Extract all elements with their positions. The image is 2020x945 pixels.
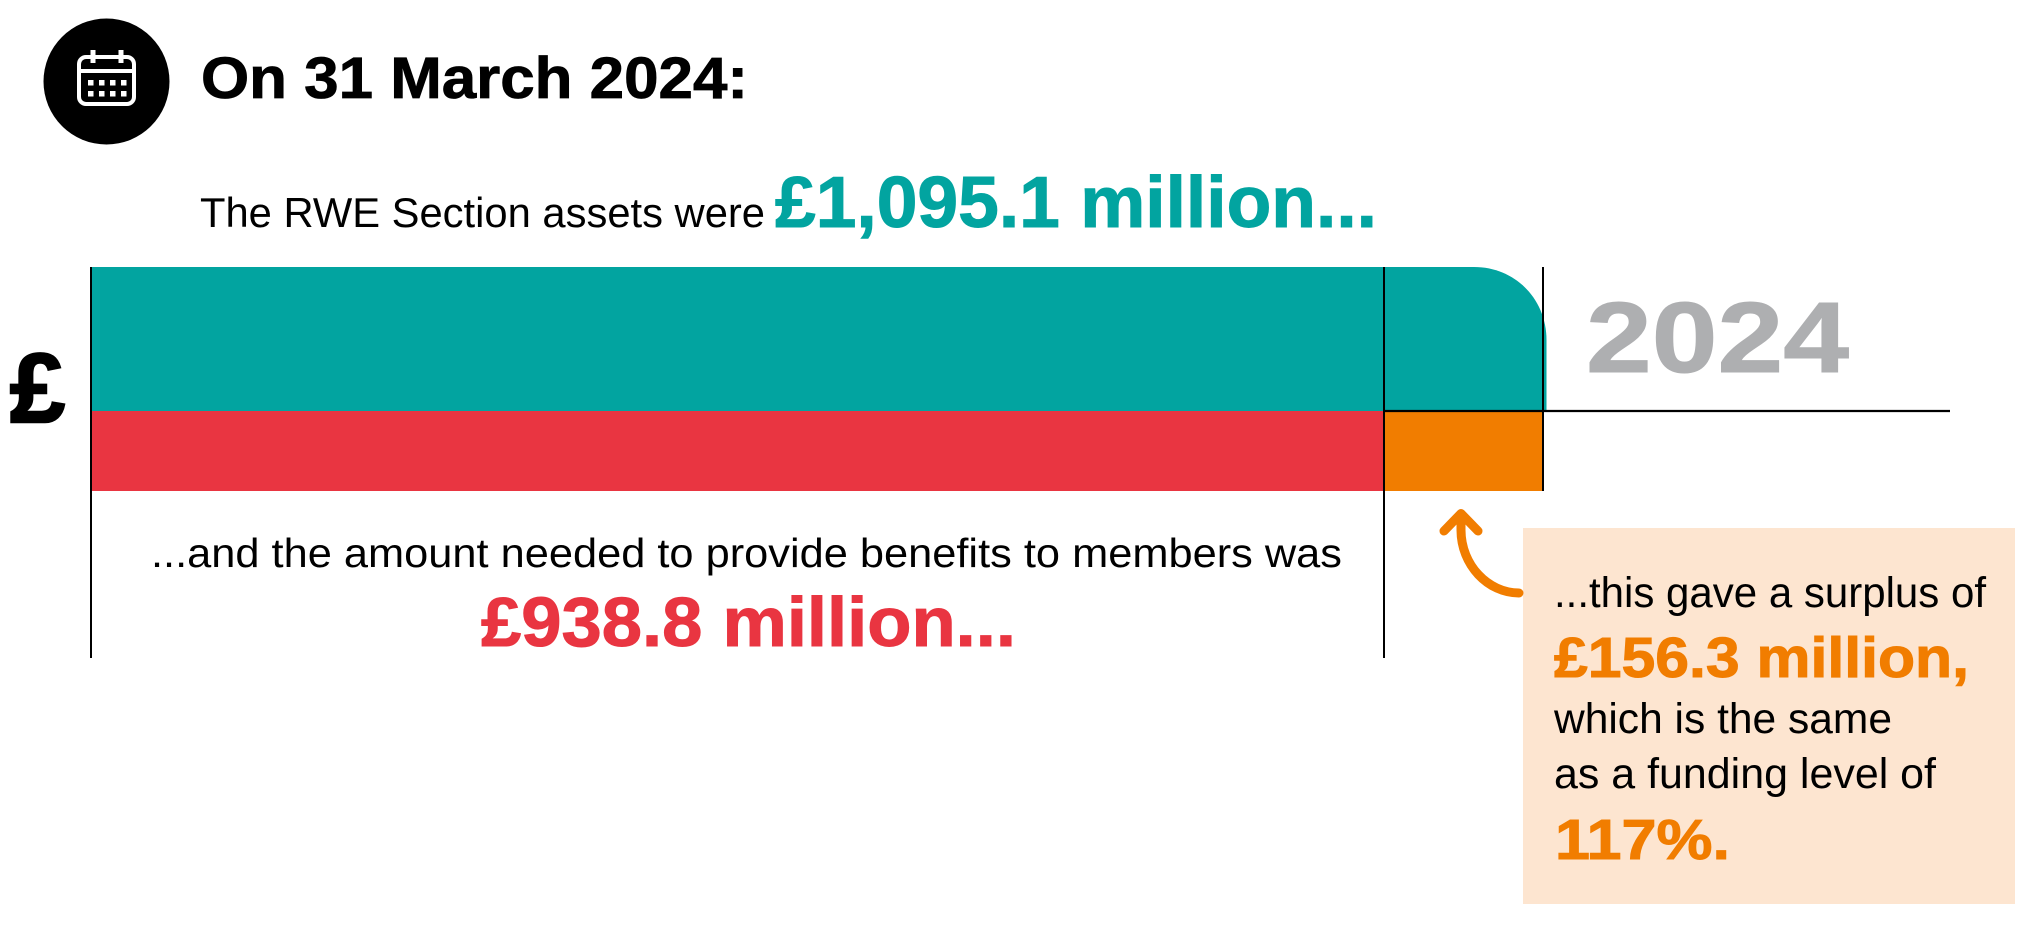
bar: assets (teal): [91, 267, 1546, 411]
value: amount needed: £938.8 million...: [481, 583, 1016, 661]
label: year 2024: 2024: [1586, 282, 1849, 394]
arrow: callout to surplus bar: [1444, 514, 1519, 593]
callout value: surplus amount: £156.3 million,: [1554, 626, 1969, 690]
text: amount needed intro: ...and the amount needed to provide benefits to members was: [151, 530, 1342, 576]
heading: date: On 31 March 2024:: [201, 46, 748, 111]
axis lines: [91, 267, 1950, 658]
text: assets intro: The RWE Section assets were: [200, 189, 765, 236]
icon: pound sign axis label: £: [10, 333, 65, 443]
callout panel: surplus: [1523, 528, 2015, 904]
callout value: funding level percent: 117%.: [1555, 808, 1730, 872]
bar: surplus (orange): [1384, 411, 1543, 491]
callout text: funding level: as a funding level of: [1554, 750, 1937, 798]
callout text: surplus intro: ...this gave a surplus of: [1554, 569, 1987, 617]
callout text: same as: which is the same: [1553, 695, 1892, 743]
value: assets amount: £1,095.1 million...: [775, 163, 1377, 243]
icon: calendar in black circle: [44, 18, 170, 144]
bar: amount needed (red): [91, 411, 1384, 491]
